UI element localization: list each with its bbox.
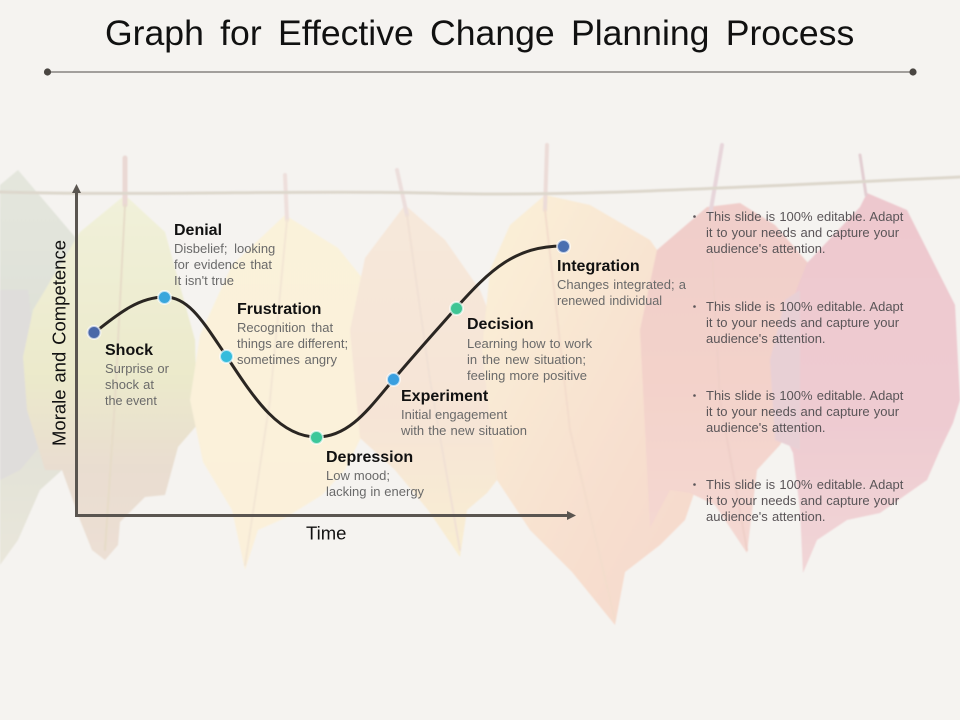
stage: Experiment	[400, 388, 527, 438]
stage: Integration: renewed individual	[557, 294, 662, 308]
note 4: it to your needs and capture your	[706, 493, 900, 508]
stage: Denial: for evidence that	[174, 257, 272, 272]
y axis label: Morale and Competence	[48, 240, 70, 446]
stage: Experiment: Initial engagement	[401, 407, 508, 422]
stage: Depression: Low mood;	[326, 468, 390, 483]
stage: Frustration: Frustration	[237, 301, 321, 318]
stage: Shock: Shock	[105, 342, 153, 359]
stage: Integration: Changes integrated; a	[557, 277, 687, 292]
note 4: audience's attention.	[706, 509, 826, 524]
curve markers	[88, 240, 570, 444]
change curve	[94, 246, 563, 437]
note 3: This slide is 100% editable. Adapt	[706, 388, 904, 403]
note 1: it to your needs and capture your	[706, 225, 900, 240]
stage: Depression: Depression	[326, 449, 413, 466]
stage: Integration	[557, 258, 687, 308]
stage: Denial: It isn't true	[174, 273, 234, 288]
note 4	[693, 477, 904, 524]
stage: Decision: feeling more positive	[467, 368, 587, 383]
x axis label: Time	[306, 522, 346, 544]
stage: Denial: Denial	[174, 222, 222, 239]
background photo: leaves on a string	[0, 145, 960, 625]
stage: Shock: Surprise or	[105, 361, 170, 376]
note 2: This slide is 100% editable. Adapt	[706, 299, 904, 314]
x axis arrow	[75, 511, 576, 520]
note 2: audience's attention.	[706, 331, 826, 346]
stage: Decision	[467, 316, 593, 383]
stage: Frustration: sometimes angry	[237, 352, 337, 367]
stage: Experiment: with the new situation	[400, 423, 527, 438]
note 2	[693, 299, 904, 346]
stage: Decision: Decision	[467, 316, 534, 333]
stage: Shock: shock at	[105, 377, 154, 392]
note 3	[693, 388, 904, 435]
note 2: it to your needs and capture your	[706, 315, 900, 330]
note 4: This slide is 100% editable. Adapt	[706, 477, 904, 492]
stage: Integration: Integration	[557, 258, 640, 275]
stage: Shock: the event	[105, 394, 157, 408]
stage: Depression	[326, 449, 425, 499]
stage: Decision: Learning how to work	[467, 336, 593, 351]
note 3: it to your needs and capture your	[706, 404, 900, 419]
stage: Shock	[105, 342, 170, 408]
title: Graph for Effective Change Planning Process	[105, 13, 854, 53]
note 1	[693, 209, 904, 256]
note 1: audience's attention.	[706, 241, 826, 256]
note 3: audience's attention.	[706, 420, 826, 435]
note 1: This slide is 100% editable. Adapt	[706, 209, 904, 224]
title divider	[44, 68, 917, 76]
stage: Denial: Disbelief; looking	[174, 241, 275, 256]
stage: Denial	[174, 222, 275, 288]
stage: Experiment: Experiment	[401, 388, 489, 405]
stage: Frustration	[237, 301, 348, 367]
y axis arrow	[72, 184, 81, 517]
stage: Decision: in the new situation;	[467, 352, 586, 367]
stage: Depression: lacking in energy	[326, 484, 425, 499]
stage: Frustration: things are different;	[237, 336, 348, 351]
stage: Frustration: Recognition that	[237, 320, 333, 335]
